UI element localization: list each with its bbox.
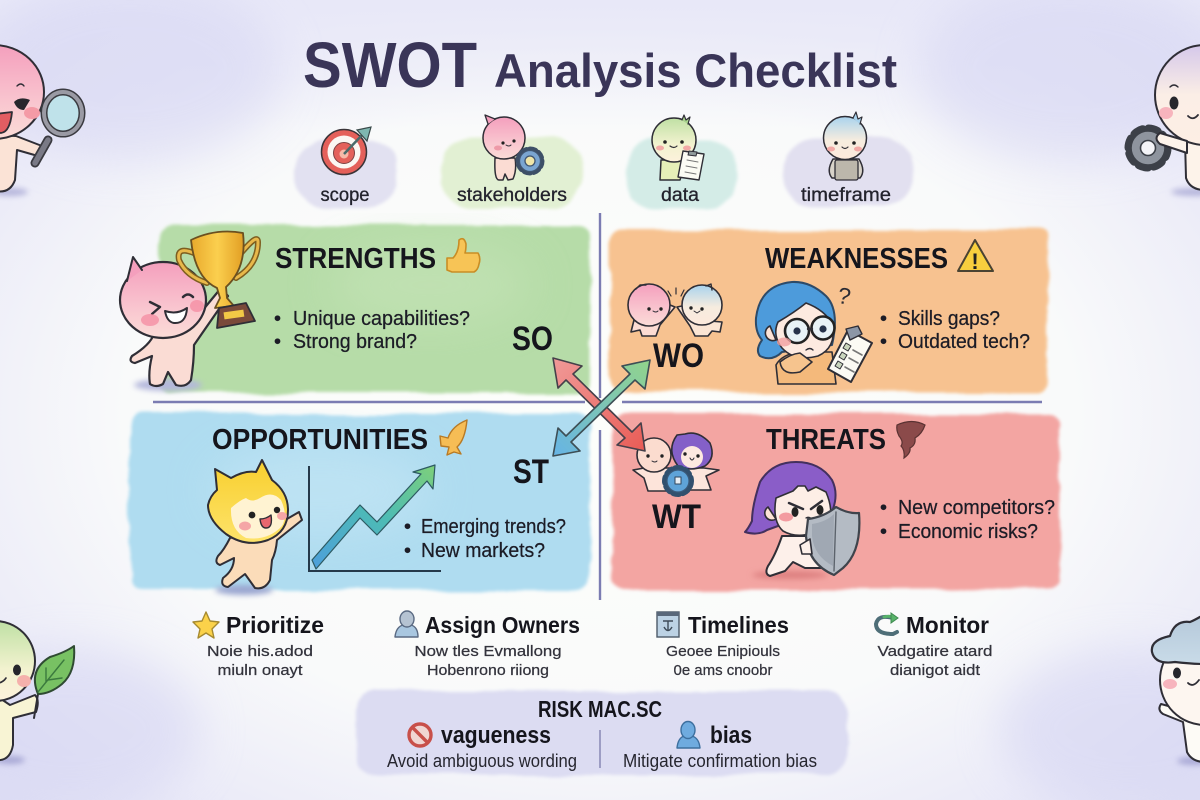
description: assign owners: Now tles Evmallong (414, 643, 562, 660)
description: prioritize: Noie his.adod (207, 643, 313, 660)
bullet list: strengths: • (274, 308, 281, 330)
bullet list: strengths: Strong brand? (293, 331, 417, 353)
description: prioritize: miuln onayt (218, 662, 303, 679)
bullet list: threats: Economic risks? (898, 521, 1038, 543)
panel: threats (612, 414, 1060, 590)
mascot: bottom left with leaf (0, 621, 74, 764)
description: monitor: Vadgatire atard (878, 643, 992, 660)
action: timelines (657, 612, 789, 679)
icon: blue-haired character with clipboard: ? (836, 282, 853, 310)
title (303, 29, 897, 101)
icon: tornado (897, 422, 925, 458)
arrow: SO to WT diagonal (553, 358, 645, 451)
description: timelines: Geoee Enipiouls (666, 643, 780, 660)
quadrant dividers (153, 213, 1042, 600)
action: monitor (876, 612, 992, 679)
icon: target (322, 127, 371, 174)
chip: timeframe (782, 112, 913, 207)
heading: timelines: Timelines (688, 612, 789, 638)
chart: rising trend (309, 465, 441, 571)
description: monitor (878, 643, 992, 679)
risk divider (599, 730, 601, 768)
icon: rocket (440, 420, 467, 455)
bullet list: strengths: • (274, 331, 281, 353)
strategy label: SO: SO (512, 320, 553, 358)
icon: calendar (657, 612, 679, 637)
panel: risk matrix (356, 691, 847, 775)
strategy label: ST: ST (513, 453, 549, 491)
title: Analysis Checklist (494, 44, 897, 97)
arrow: WO to ST diagonal (553, 360, 650, 456)
bullet list: opportunities: Emerging trends? (421, 516, 566, 538)
action: assign owners (395, 611, 580, 679)
description: assign owners: Hobenrono riiong (427, 662, 549, 679)
heading: threats: THREATS (766, 424, 886, 456)
mascot: top right with gear (1129, 45, 1200, 196)
bullet list: threats: New competitors? (898, 497, 1055, 519)
icon: two characters high five (628, 284, 722, 336)
panel: strengths (120, 225, 590, 393)
description: prioritize (207, 643, 313, 679)
risk: vagueness: vagueness (441, 722, 551, 749)
heading: strengths: STRENGTHS (275, 243, 436, 275)
description: monitor: dianigot aidt (890, 662, 981, 679)
icon: prohibited (409, 724, 431, 746)
bullet list: strengths: Unique capabilities? (293, 308, 470, 330)
bullet list: weaknesses (880, 308, 1030, 353)
heading: weaknesses: WEAKNESSES (765, 243, 948, 275)
label: scope: scope (320, 185, 370, 206)
heading: risk: RISK MAC.SC (538, 696, 662, 722)
icon: blue-haired character with clipboard (756, 282, 872, 384)
strategy label: WT: WT (652, 498, 701, 536)
icon: pink character with trophy (120, 232, 258, 391)
icon: yellow character pointing (208, 460, 302, 595)
bullet list: threats: • (880, 497, 887, 519)
bullet list: threats: • (880, 521, 887, 543)
bullet list: opportunities: • (404, 516, 411, 538)
description: assign owners (414, 643, 562, 679)
title: SWOT (303, 29, 477, 101)
chip: scope (295, 127, 397, 209)
heading: assign owners: Assign Owners (425, 612, 580, 638)
bullet list: threats (880, 497, 1055, 543)
icon: two characters with gear (633, 433, 719, 493)
bullet list: opportunities: • (404, 540, 411, 562)
chip: data (625, 115, 737, 208)
panel: opportunities (130, 413, 590, 595)
icon: pink character with gear (483, 115, 541, 180)
label: timeframe: timeframe (801, 185, 891, 206)
icon: warning triangle: ! (971, 249, 979, 274)
bullet list: weaknesses: • (880, 331, 887, 353)
bullet list: weaknesses: Skills gaps? (898, 308, 1000, 330)
icon: warning triangle (958, 240, 993, 274)
action: prioritize (193, 612, 324, 679)
bullet list: weaknesses: Outdated tech? (898, 331, 1030, 353)
risk note: vagueness: Avoid ambiguous wording (387, 751, 577, 771)
label: stakeholders: stakeholders (457, 185, 567, 206)
icon: green character with clipboard (652, 115, 704, 180)
icon: star (193, 612, 219, 638)
icon: thumbs up (447, 239, 480, 272)
bullet list: strengths (274, 308, 470, 353)
heading: monitor: Monitor (906, 612, 989, 638)
panel: weaknesses (610, 230, 1048, 392)
bullet list: opportunities: New markets? (421, 540, 545, 562)
icon: purple-haired character with shield (745, 462, 859, 579)
chip: stakeholders (440, 115, 583, 207)
icon: monitor cycle (876, 613, 898, 634)
bullet list: weaknesses: • (880, 308, 887, 330)
bullet list: opportunities (404, 516, 566, 562)
icon: person blue (677, 722, 700, 748)
label: data: data (661, 185, 699, 206)
mascot: top left with magnifier (0, 45, 82, 196)
icon: person (395, 611, 418, 637)
heading: prioritize: Prioritize (226, 612, 324, 638)
strategy label: WO: WO (653, 337, 704, 375)
heading: opportunities: OPPORTUNITIES (212, 424, 428, 456)
risk: bias: bias (710, 722, 752, 749)
icon: blue character with tablet (824, 112, 866, 180)
description: timelines (666, 643, 780, 679)
description: timelines: 0e ams cnoobr (674, 662, 772, 679)
risk note: bias: Mitigate confirmation bias (623, 751, 817, 771)
mascot: bottom right with cloud hair (1152, 614, 1200, 765)
